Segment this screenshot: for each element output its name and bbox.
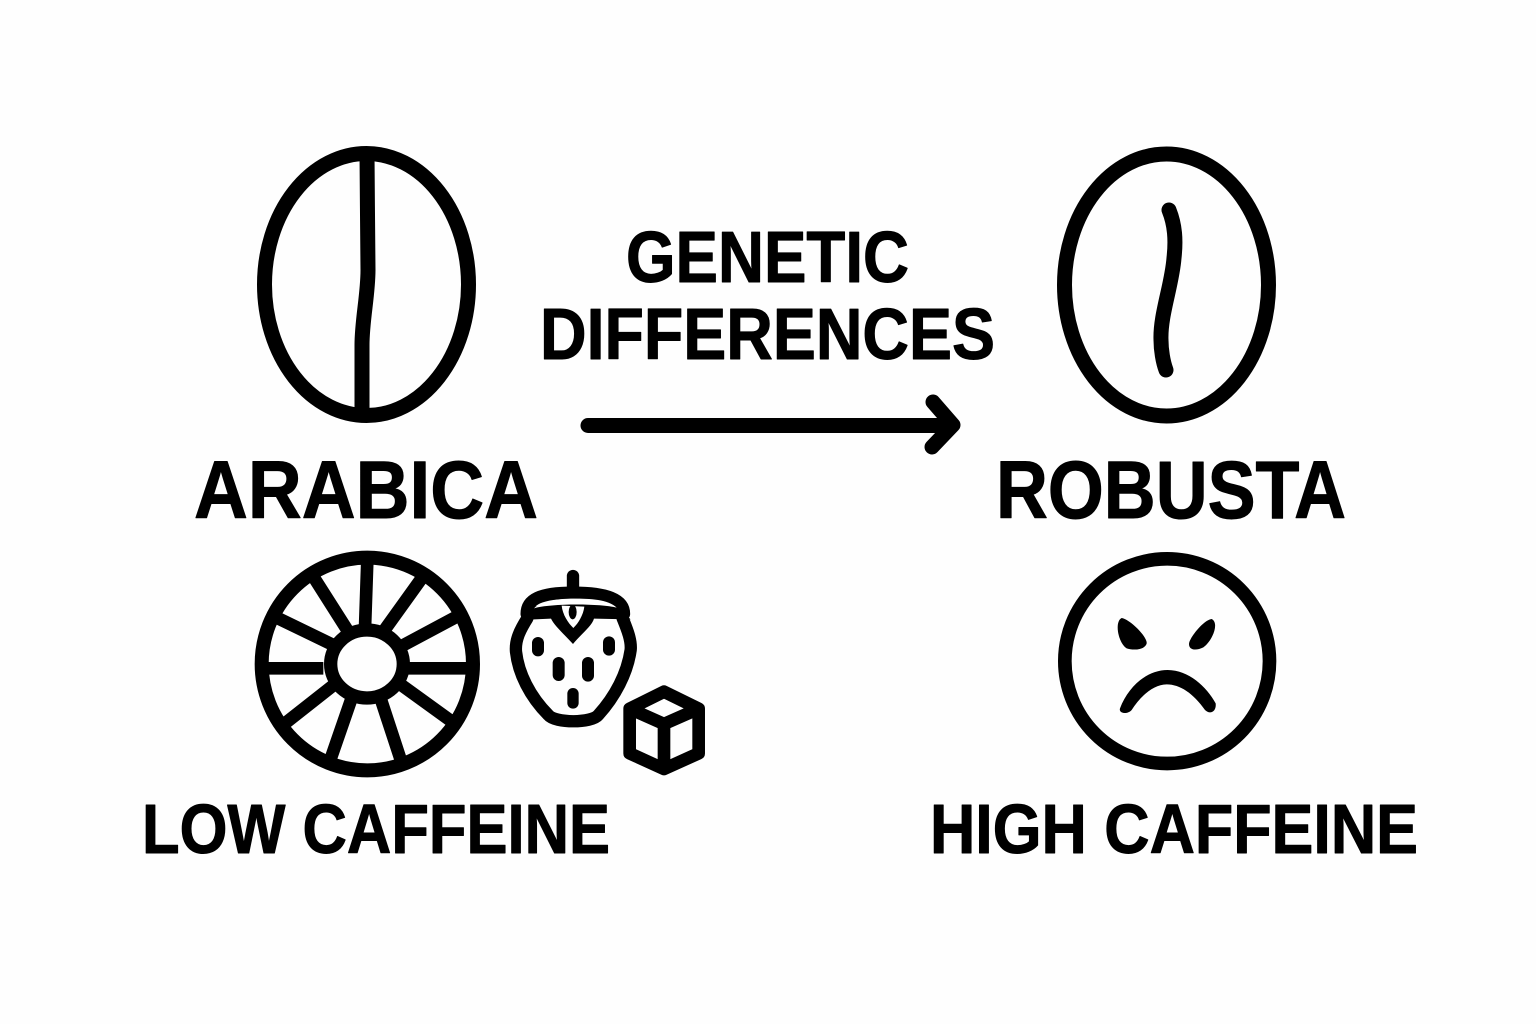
heading: genetic differences: DIFFERENCES [540,295,995,375]
icon: sugar cube [630,692,699,769]
icon: strawberry [516,576,631,721]
heading: genetic differences [540,218,995,375]
icon: arabica bean [264,153,468,416]
icon: robusta bean [1064,154,1268,416]
label: high caffeine: HIGH CAFFEINE [930,790,1418,868]
label: low caffeine: LOW CAFFEINE [142,790,610,868]
label: arabica: ARABICA [194,445,538,536]
arrow: arabica to robusta [588,402,953,447]
icon: frowning face [1065,559,1269,763]
heading: genetic differences: GENETIC [626,218,909,298]
label: robusta: ROBUSTA [996,445,1346,536]
icon: flavor wheel [262,558,473,770]
